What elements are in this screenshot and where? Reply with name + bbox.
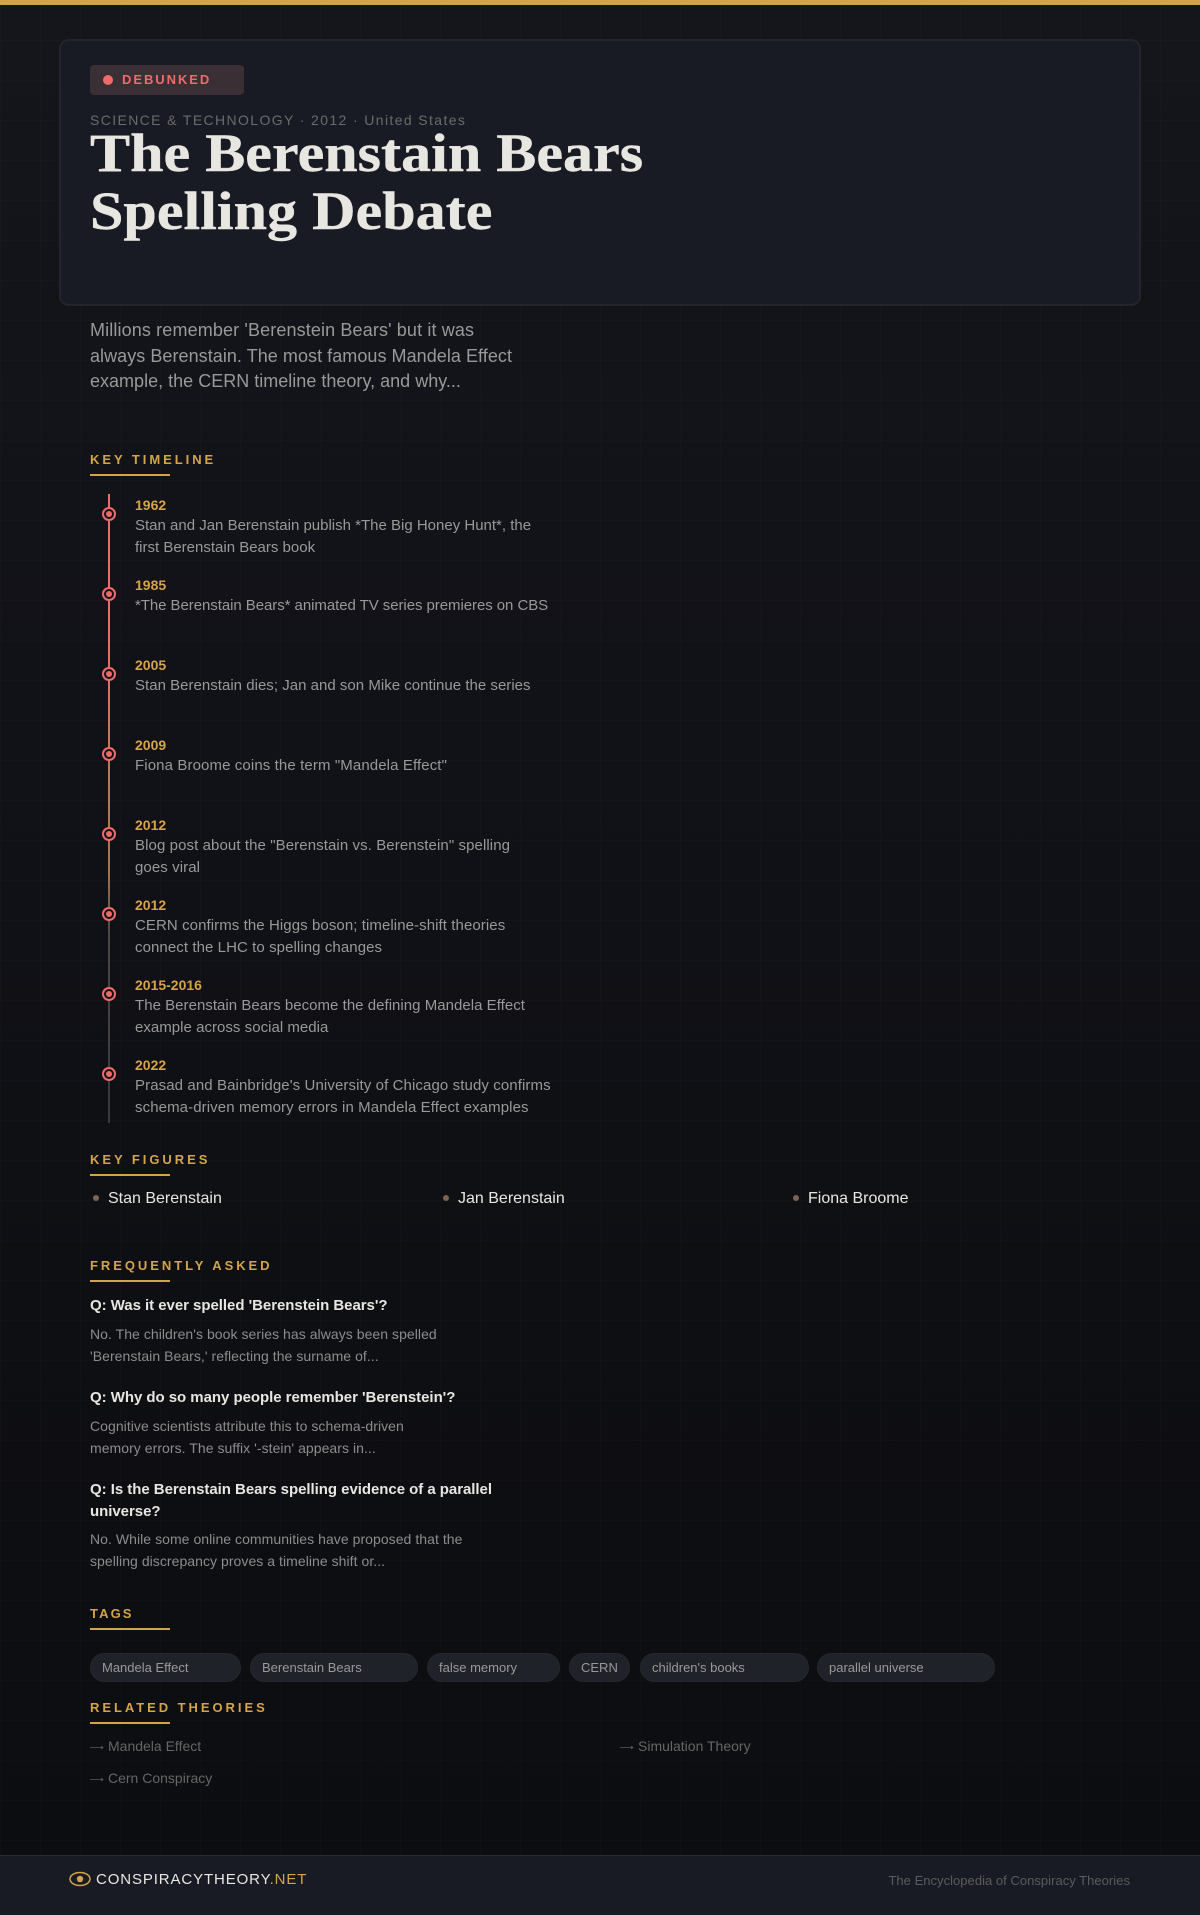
timeline event: 2012 CERN: [102, 897, 505, 956]
timeline event: 2009: [102, 737, 447, 774]
text: Jan Berenstain: [458, 1190, 565, 1207]
text: Q: Was it ever spelled 'Berenstein Bears'?: [90, 1297, 388, 1314]
tag: Mandela Effect: Mandela Effect: [102, 1660, 188, 1675]
tag: children's books: children's books: [652, 1660, 745, 1675]
meta line: SCIENCE & TECHNOLOGY · 2012 · United States: [90, 112, 466, 128]
text: Blog post about the "Berenstain vs. Berenstein" spelling: [135, 837, 510, 854]
text: example across social media: [135, 1019, 328, 1036]
heading: key figures: KEY FIGURES: [90, 1152, 210, 1167]
tag: Berenstain Bears: Berenstain Bears: [262, 1660, 362, 1675]
footer brand: CONSPIRACYTHEORY.NET: [96, 1871, 307, 1888]
timeline event: 1962: [102, 497, 531, 556]
text: No. While some online communities have proposed that the: [90, 1531, 462, 1547]
tag: false memory: false memory: [439, 1660, 517, 1675]
footer: [0, 1855, 1200, 1915]
text: 2005: [135, 657, 166, 673]
text: Cognitive scientists attribute this to schema-driven: [90, 1418, 404, 1434]
faq 3: [90, 1481, 492, 1569]
tag: parallel universe: [817, 1653, 995, 1682]
text: 2015-2016: [135, 977, 202, 993]
text: Fiona Broome: [808, 1190, 908, 1207]
heading: frequently asked: FREQUENTLY ASKED: [90, 1258, 273, 1273]
tag: false memory: [427, 1653, 560, 1682]
text: first Berenstain Bears book: [135, 539, 315, 556]
text: Q: Why do so many people remember 'Berenstein'?: [90, 1389, 455, 1406]
text: schema-driven memory errors in Mandela Effect examples: [135, 1099, 529, 1116]
footer tagline: The Encyclopedia of Conspiracy Theories: [888, 1873, 1130, 1888]
top accent bar: [0, 0, 1200, 5]
timeline event: 2022: [102, 1057, 551, 1116]
text: No. The children's book series has always been spelled: [90, 1326, 437, 1342]
timeline event: 2015-2016: [102, 977, 525, 1036]
text: *The Berenstain Bears* animated TV series premieres on CBS: [135, 597, 548, 614]
description: [90, 320, 512, 391]
icon: eye logo: [69, 1872, 91, 1886]
text: connect the LHC to spelling changes: [135, 939, 382, 956]
text: Stan and Jan Berenstain publish *The Big Honey Hunt*, the: [135, 517, 531, 534]
title: The Berenstain Bears: [90, 123, 643, 183]
related: Mandela Effect: Mandela Effect: [108, 1738, 201, 1754]
description: Millions remember 'Berenstein Bears' but it was: [90, 320, 474, 340]
heading: tags: TAGS: [90, 1606, 134, 1621]
figure: Fiona Broome: [793, 1190, 908, 1207]
timeline: [108, 494, 110, 1123]
text: universe?: [90, 1503, 161, 1520]
text: 2009: [135, 737, 166, 753]
text: Q: Is the Berenstain Bears spelling evidence of a parallel: [90, 1481, 492, 1498]
text: Fiona Broome coins the term "Mandela Effect": [135, 757, 447, 774]
related: Simulation Theory: Simulation Theory: [638, 1738, 751, 1754]
timeline event: 2005: [102, 657, 531, 694]
text: 2012: [135, 897, 166, 913]
text: goes viral: [135, 859, 200, 876]
badge label: DEBUNKED: [122, 72, 211, 87]
text: 'Berenstain Bears,' reflecting the surname of...: [90, 1348, 379, 1364]
faq 2: [90, 1389, 455, 1456]
text: 1962: [135, 497, 166, 513]
figure: Jan Berenstain: [443, 1190, 565, 1207]
heading: key timeline: KEY TIMELINE: [90, 452, 216, 467]
tag: Mandela Effect: [90, 1653, 241, 1682]
text: Stan Berenstain: [108, 1190, 222, 1207]
faq 1: [90, 1297, 437, 1364]
text: memory errors. The suffix '-stein' appears in...: [90, 1440, 376, 1456]
panel: hero header: [59, 39, 1141, 306]
tag: CERN: [569, 1653, 630, 1682]
badge: debunked: [90, 65, 244, 95]
figure: Stan Berenstain: [93, 1190, 222, 1207]
tag: children's books: [640, 1653, 809, 1682]
tag: CERN: CERN: [581, 1660, 618, 1675]
tag: Berenstain Bears: [250, 1653, 418, 1682]
text: CERN confirms the Higgs boson; timeline-shift theories: [135, 917, 505, 934]
tag: parallel universe: parallel universe: [829, 1660, 924, 1675]
description: example, the CERN timeline theory, and why...: [90, 371, 461, 391]
text: Prasad and Bainbridge's University of Chicago study confirms: [135, 1077, 551, 1094]
timeline event: 2012 viral: [102, 817, 510, 876]
icon: status dot: [103, 75, 113, 85]
text: spelling discrepancy proves a timeline shift or...: [90, 1553, 385, 1569]
description: always Berenstain. The most famous Mandela Effect: [90, 346, 512, 366]
text: 2012: [135, 817, 166, 833]
title: [90, 123, 643, 242]
text: The Berenstain Bears become the defining Mandela Effect: [135, 997, 525, 1014]
timeline event: 1985: [102, 577, 548, 614]
text: Stan Berenstain dies; Jan and son Mike continue the series: [135, 677, 531, 694]
text: 2022: [135, 1057, 166, 1073]
title: Spelling Debate: [90, 181, 492, 241]
related: Cern Conspiracy: Cern Conspiracy: [108, 1770, 212, 1786]
timeline axis: [108, 494, 110, 1123]
heading: related theories: RELATED THEORIES: [90, 1700, 268, 1715]
text: 1985: [135, 577, 166, 593]
